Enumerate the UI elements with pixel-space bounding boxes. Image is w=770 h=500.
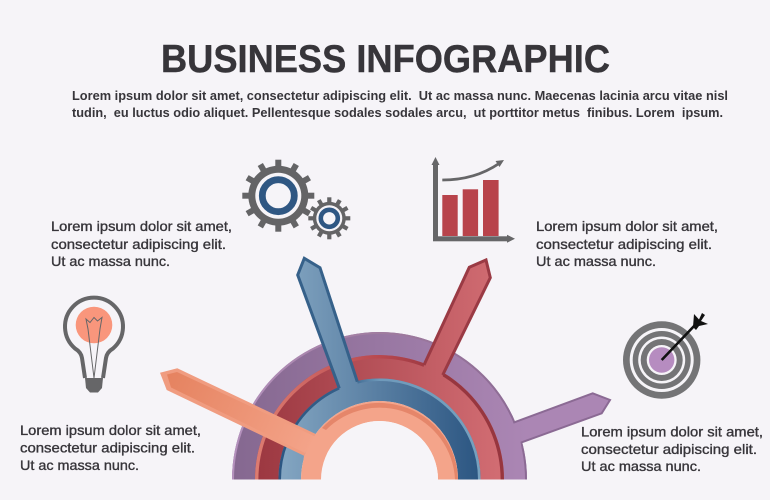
text block: bottom left xyxy=(20,422,201,473)
text block: bottom right: consectetur adipiscing elit. xyxy=(581,441,757,457)
arm: purple xyxy=(490,393,610,460)
text block: top left xyxy=(51,218,232,269)
icon: bar chart xyxy=(432,157,515,243)
ring: red xyxy=(255,355,504,480)
blue ring edge xyxy=(280,380,479,480)
text block: top left: Lorem ipsum dolor sit amet, xyxy=(51,218,232,234)
icon: target xyxy=(623,313,708,399)
text block: top right: Ut ac massa nunc. xyxy=(536,253,656,269)
ring: purple xyxy=(232,332,527,480)
icon: light bulb xyxy=(65,298,123,392)
text block: top left: consectetur adipiscing elit. xyxy=(51,236,226,252)
orange ring edge xyxy=(322,403,458,480)
arm: orange xyxy=(160,368,316,456)
icon: gears xyxy=(242,160,350,239)
text block: top right xyxy=(536,218,718,269)
text block: bottom left: Ut ac massa nunc. xyxy=(20,457,139,473)
center opening xyxy=(321,421,438,480)
semicircle diagram xyxy=(160,258,610,480)
arm: blue xyxy=(298,258,362,402)
text block: bottom right: Ut ac massa nunc. xyxy=(581,458,701,474)
text block: bottom left: consectetur adipiscing elit. xyxy=(20,440,195,456)
arm: red xyxy=(418,260,490,395)
text block: bottom left: Lorem ipsum dolor sit amet, xyxy=(20,422,201,438)
intro text xyxy=(72,88,728,120)
purple ring edge xyxy=(233,333,526,480)
intro text: Lorem ipsum dolor sit amet, consectetur adipiscing elit. Ut ac massa nunc. Maecenas lacinia arcu vitae nisl xyxy=(72,88,728,103)
title: BUSINESS INFOGRAPHIC xyxy=(161,38,610,81)
ring: orange xyxy=(301,401,458,480)
text block: bottom right xyxy=(581,424,763,474)
text block: top left: Ut ac massa nunc. xyxy=(51,253,170,269)
text block: bottom right: Lorem ipsum dolor sit amet, xyxy=(581,424,763,440)
red ring edge xyxy=(257,357,502,480)
orange arm join xyxy=(301,434,330,480)
intro text: tudin, eu luctus odio aliquet. Pellentesque sodales sodales arcu, ut porttitor metus finibus. Lorem ipsum. xyxy=(72,105,723,120)
text block: top right: Lorem ipsum dolor sit amet, xyxy=(536,218,718,234)
ring: blue xyxy=(278,378,480,480)
text block: top right: consectetur adipiscing elit. xyxy=(536,236,712,252)
